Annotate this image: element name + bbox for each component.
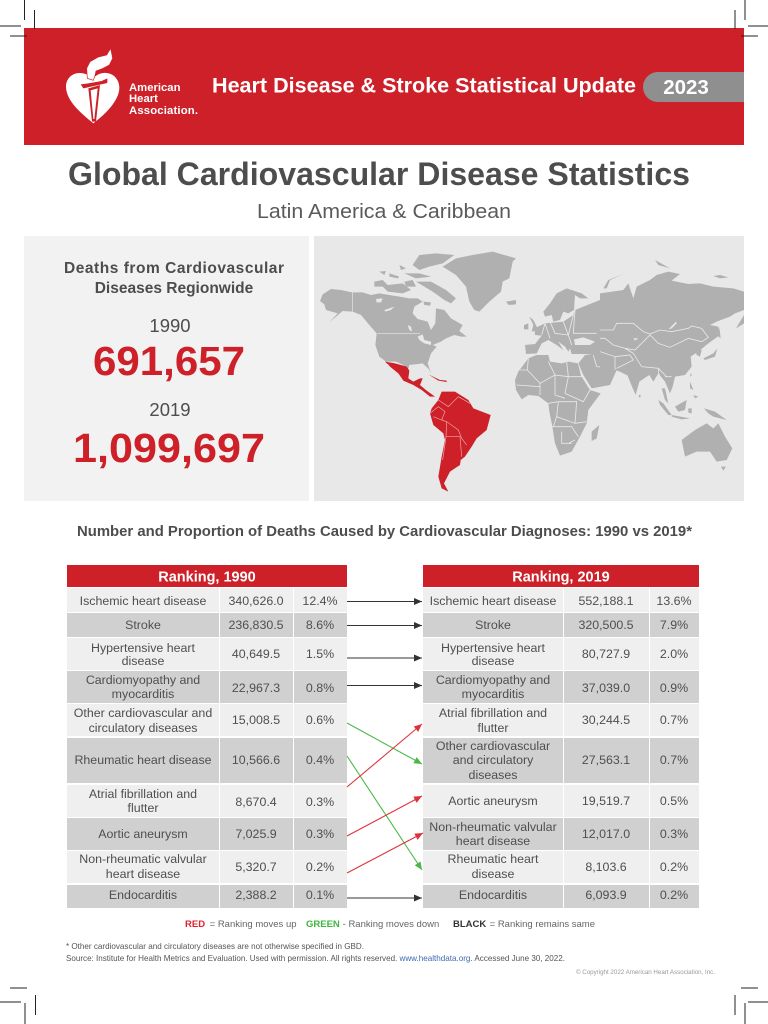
- year 2019: 2019: [149, 399, 191, 420]
- subtitle: Latin America & Caribbean: [257, 201, 511, 223]
- row: atrial fibrillation 2019: 30,244.5: [582, 713, 630, 727]
- row: cardiomyopathy 2019: 37,039.0: [582, 681, 630, 695]
- row: other cardiovascular 1990: [67, 704, 347, 736]
- row: hypertensive heart disease 2019: 80,727.9: [582, 647, 630, 661]
- year 1990: 1990: [149, 315, 191, 336]
- panel heading: Deaths from Cardiovascular: [64, 260, 284, 277]
- arrow: endocarditis unchanged: [347, 897, 422, 899]
- row: hypertensive heart disease 2019: Hypertensive heart: [441, 641, 546, 655]
- arrow: aortic aneurysm moves up: [347, 796, 422, 836]
- table: ranking 2019: [423, 565, 699, 908]
- row: non-rheumatic valvular 1990: heart disease: [106, 867, 180, 881]
- row: hypertensive heart disease 1990: disease: [122, 654, 164, 668]
- row: ischemic heart disease 1990: Ischemic heart disease: [80, 594, 206, 608]
- row: hypertensive heart disease 1990: Hypertensive heart: [91, 641, 196, 655]
- copyright: © Copyright 2022 American Heart Association, Inc.: [576, 969, 715, 976]
- row: cardiomyopathy 2019: myocarditis: [462, 687, 524, 701]
- arrow: ischemic heart disease unchanged: [347, 600, 422, 602]
- legend: RED: [185, 919, 205, 930]
- row: endocarditis 2019: Endocarditis: [459, 888, 527, 902]
- map: Latin America and Caribbean highlighted in red: [385, 362, 491, 492]
- arrow: cardiomyopathy unchanged: [347, 684, 422, 686]
- row: endocarditis 2019: 0.2%: [660, 888, 688, 902]
- row: ischemic heart disease 1990: [67, 588, 347, 612]
- footnotes: * Other cardiovascular and circulatory diseases are not otherwise specified in GBD.: [66, 941, 364, 951]
- panel: world map: [314, 236, 744, 501]
- row: hypertensive heart disease 2019: disease: [472, 654, 514, 668]
- row: cardiomyopathy 1990: myocarditis: [112, 687, 174, 701]
- main title: Global Cardiovascular Disease Statistics: [68, 156, 690, 192]
- map: Europe, Africa and Middle East: [515, 288, 630, 456]
- row: endocarditis 2019: 6,093.9: [585, 888, 627, 902]
- legend: BLACK: [453, 919, 486, 930]
- table header 1990: [67, 565, 347, 587]
- row: cardiomyopathy 1990: [67, 671, 347, 703]
- row: endocarditis 2019: [423, 885, 699, 908]
- row: endocarditis 1990: 2,388.2: [235, 888, 277, 902]
- legend: - Ranking moves down: [340, 919, 439, 930]
- row: aortic aneurysm 1990: 7,025.9: [235, 827, 277, 841]
- row: ischemic heart disease 1990: 12.4%: [302, 594, 338, 608]
- row: atrial fibrillation 2019: [423, 704, 699, 736]
- row: other cardiovascular 2019: [423, 738, 699, 783]
- row: cardiomyopathy 1990: 0.8%: [306, 681, 334, 695]
- row: other cardiovascular 2019: diseases: [469, 768, 517, 782]
- row: rheumatic heart disease 2019: disease: [472, 867, 514, 881]
- banner title: Heart Disease & Stroke Statistical Update: [212, 75, 636, 98]
- row: stroke 1990: Stroke: [125, 618, 161, 632]
- table header 2019: Ranking, 2019: [512, 570, 610, 586]
- row: aortic aneurysm 1990: Aortic aneurysm: [98, 827, 188, 841]
- row: endocarditis 1990: 0.1%: [306, 888, 334, 902]
- legend: = Ranking remains same: [487, 919, 595, 930]
- row: hypertensive heart disease 1990: [67, 638, 347, 670]
- table header 1990: Ranking, 1990: [158, 570, 256, 586]
- arrow: atrial fibrillation moves up: [347, 724, 422, 787]
- row: other cardiovascular 1990: 15,008.5: [232, 713, 280, 727]
- row: cardiomyopathy 1990: 22,967.3: [232, 681, 280, 695]
- logo wordmark: American: [129, 82, 181, 94]
- year badge: 2023: [663, 76, 709, 99]
- row: aortic aneurysm 2019: [423, 785, 699, 817]
- row: atrial fibrillation 2019: 0.7%: [660, 713, 688, 727]
- panel heading: Diseases Regionwide: [95, 280, 254, 297]
- row: other cardiovascular 2019: 0.7%: [660, 753, 688, 767]
- row: other cardiovascular 2019: 27,563.1: [582, 753, 630, 767]
- row: non-rheumatic valvular 2019: [423, 818, 699, 850]
- footnotes: [66, 941, 565, 963]
- row: atrial fibrillation 1990: 8,670.4: [235, 795, 277, 809]
- row: stroke 2019: 320,500.5: [578, 618, 634, 632]
- arrow: stroke unchanged: [347, 624, 422, 626]
- row: atrial fibrillation 2019: Atrial fibrillation and: [439, 706, 547, 720]
- row: non-rheumatic valvular 1990: 0.2%: [306, 860, 334, 874]
- row: aortic aneurysm 2019: 19,519.7: [582, 794, 630, 808]
- row: other cardiovascular 2019: and circulatory: [453, 753, 534, 767]
- row: hypertensive heart disease 1990: 1.5%: [306, 647, 334, 661]
- row: cardiomyopathy 2019: [423, 671, 699, 703]
- row: rheumatic heart disease 1990: Rheumatic heart disease: [74, 753, 212, 767]
- row: atrial fibrillation 2019: flutter: [478, 721, 508, 735]
- row: rheumatic heart disease 2019: 0.2%: [660, 860, 688, 874]
- legend: = Ranking moves up: [207, 919, 297, 930]
- deaths 1990: 691,657: [93, 338, 245, 384]
- section heading: Number and Proportion of Deaths Caused by Cardiovascular Diagnoses: 1990 vs 2019*: [77, 524, 692, 540]
- row: stroke 2019: Stroke: [475, 618, 511, 632]
- row: aortic aneurysm 1990: 0.3%: [306, 827, 334, 841]
- table header 2019: [423, 565, 699, 587]
- row: ischemic heart disease 2019: 13.6%: [656, 594, 692, 608]
- map: North America and Greenland: [320, 252, 516, 373]
- row: aortic aneurysm 2019: 0.5%: [660, 794, 688, 808]
- row: stroke 1990: 236,830.5: [228, 618, 284, 632]
- row: non-rheumatic valvular 1990: 5,320.7: [235, 860, 277, 874]
- row: other cardiovascular 1990: Other cardiovascular and: [74, 706, 212, 720]
- row: rheumatic heart disease 2019: 8,103.6: [585, 860, 627, 874]
- row: hypertensive heart disease 2019: [423, 638, 699, 670]
- row: rheumatic heart disease 2019: [423, 851, 699, 883]
- logo wordmark: Heart: [129, 93, 158, 105]
- row: rheumatic heart disease 1990: 10,566.6: [232, 753, 280, 767]
- row: atrial fibrillation 1990: [67, 785, 347, 817]
- row: stroke 1990: [67, 613, 347, 637]
- arrow: hypertensive unchanged: [347, 657, 422, 659]
- row: cardiomyopathy 2019: 0.9%: [660, 681, 688, 695]
- row: rheumatic heart disease 1990: 0.4%: [306, 753, 334, 767]
- row: ischemic heart disease 2019: 552,188.1: [578, 594, 634, 608]
- row: hypertensive heart disease 1990: 40,649.5: [232, 647, 280, 661]
- row: atrial fibrillation 1990: Atrial fibrillation and: [89, 787, 197, 801]
- header banner: [24, 28, 744, 145]
- row: non-rheumatic valvular 1990: [67, 851, 347, 883]
- arrow: rheumatic moves down: [347, 756, 422, 870]
- row: endocarditis 1990: [67, 885, 347, 908]
- row: aortic aneurysm 1990: [67, 818, 347, 850]
- row: cardiomyopathy 2019: Cardiomyopathy and: [436, 673, 550, 687]
- row: non-rheumatic valvular 2019: 12,017.0: [582, 827, 630, 841]
- panel: deaths regionwide: [24, 236, 309, 501]
- row: stroke 2019: 7.9%: [660, 618, 688, 632]
- year badge: [643, 72, 744, 102]
- row: stroke 1990: 8.6%: [306, 618, 334, 632]
- footnotes: Source: Institute for Health Metrics and Evaluation. Used with permission. All rights reserved. www.healthdata.org. Accessed June 30, 2022.: [66, 953, 565, 963]
- row: cardiomyopathy 1990: Cardiomyopathy and: [86, 673, 200, 687]
- row: rheumatic heart disease 1990: [67, 738, 347, 783]
- row: non-rheumatic valvular 2019: heart disease: [456, 834, 530, 848]
- table: ranking 1990: [67, 565, 347, 908]
- row: non-rheumatic valvular 1990: Non-rheumatic valvular: [79, 852, 207, 866]
- deaths 2019: 1,099,697: [73, 425, 265, 471]
- row: stroke 2019: [423, 613, 699, 637]
- arrows between rankings: [347, 602, 423, 898]
- row: endocarditis 1990: Endocarditis: [109, 888, 177, 902]
- row: other cardiovascular 1990: 0.6%: [306, 713, 334, 727]
- arrow: non-rheumatic moves up: [347, 833, 423, 873]
- row: ischemic heart disease 1990: 340,626.0: [228, 594, 284, 608]
- logo wordmark: Association.: [129, 105, 198, 117]
- row: ischemic heart disease 2019: [423, 588, 699, 612]
- row: atrial fibrillation 1990: flutter: [128, 801, 158, 815]
- legend: GREEN: [306, 919, 340, 930]
- map: Asia and Oceania: [600, 260, 744, 471]
- row: aortic aneurysm 2019: Aortic aneurysm: [448, 794, 538, 808]
- row: other cardiovascular 2019: Other cardiovascular: [436, 739, 550, 753]
- icon: American Heart Association heart and torch logo: [66, 48, 119, 123]
- arrow: other cardiovascular moves down: [347, 723, 422, 764]
- row: rheumatic heart disease 2019: Rheumatic heart: [448, 852, 539, 866]
- row: other cardiovascular 1990: circulatory diseases: [89, 721, 197, 735]
- row: ischemic heart disease 2019: Ischemic heart disease: [430, 594, 556, 608]
- row: non-rheumatic valvular 2019: Non-rheumatic valvular: [429, 820, 557, 834]
- row: atrial fibrillation 1990: 0.3%: [306, 795, 334, 809]
- row: hypertensive heart disease 2019: 2.0%: [660, 647, 688, 661]
- row: non-rheumatic valvular 2019: 0.3%: [660, 827, 688, 841]
